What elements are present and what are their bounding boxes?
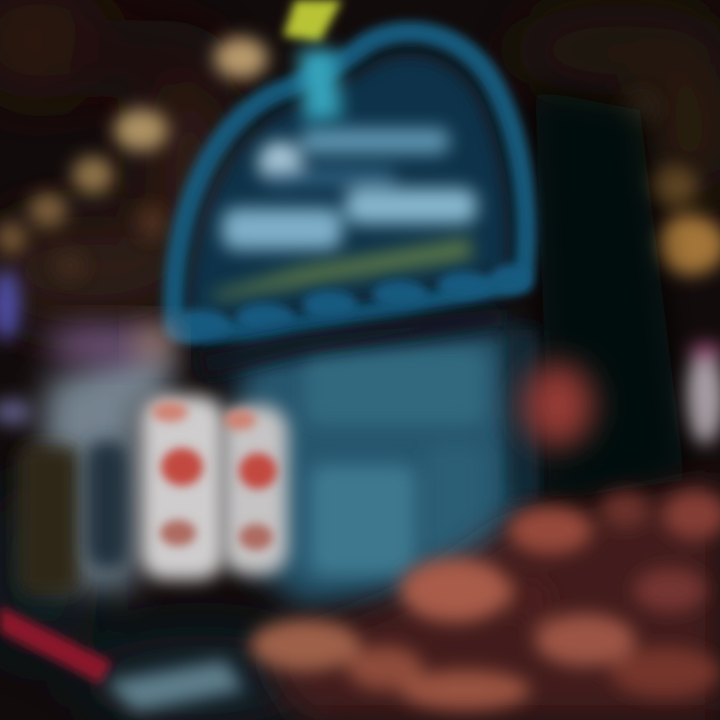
neon side lights [0, 269, 720, 444]
reel two [222, 405, 288, 575]
arched sign [168, 32, 530, 380]
light base tray [105, 660, 245, 712]
green and yellow strip [212, 238, 472, 300]
bokeh lights [0, 37, 720, 280]
cabinet panels [305, 330, 538, 575]
red symbols [152, 402, 277, 550]
red stripe [0, 606, 112, 684]
pile of poker chips [250, 480, 720, 720]
reel one [140, 395, 225, 580]
icon: yellow and cyan pennant [283, 0, 342, 122]
heading text glow [222, 128, 477, 250]
dark side panel [18, 445, 80, 595]
slot reels [18, 324, 288, 595]
cabinet body [235, 325, 522, 605]
sign outline [174, 32, 526, 332]
floating red chip [522, 363, 594, 447]
scalloped edge [168, 264, 530, 343]
sign interior [188, 53, 511, 320]
shadow under edge [195, 308, 505, 380]
reel housing [40, 345, 170, 590]
slot machine cabinet [235, 325, 538, 605]
dark column behind sign [535, 90, 685, 500]
